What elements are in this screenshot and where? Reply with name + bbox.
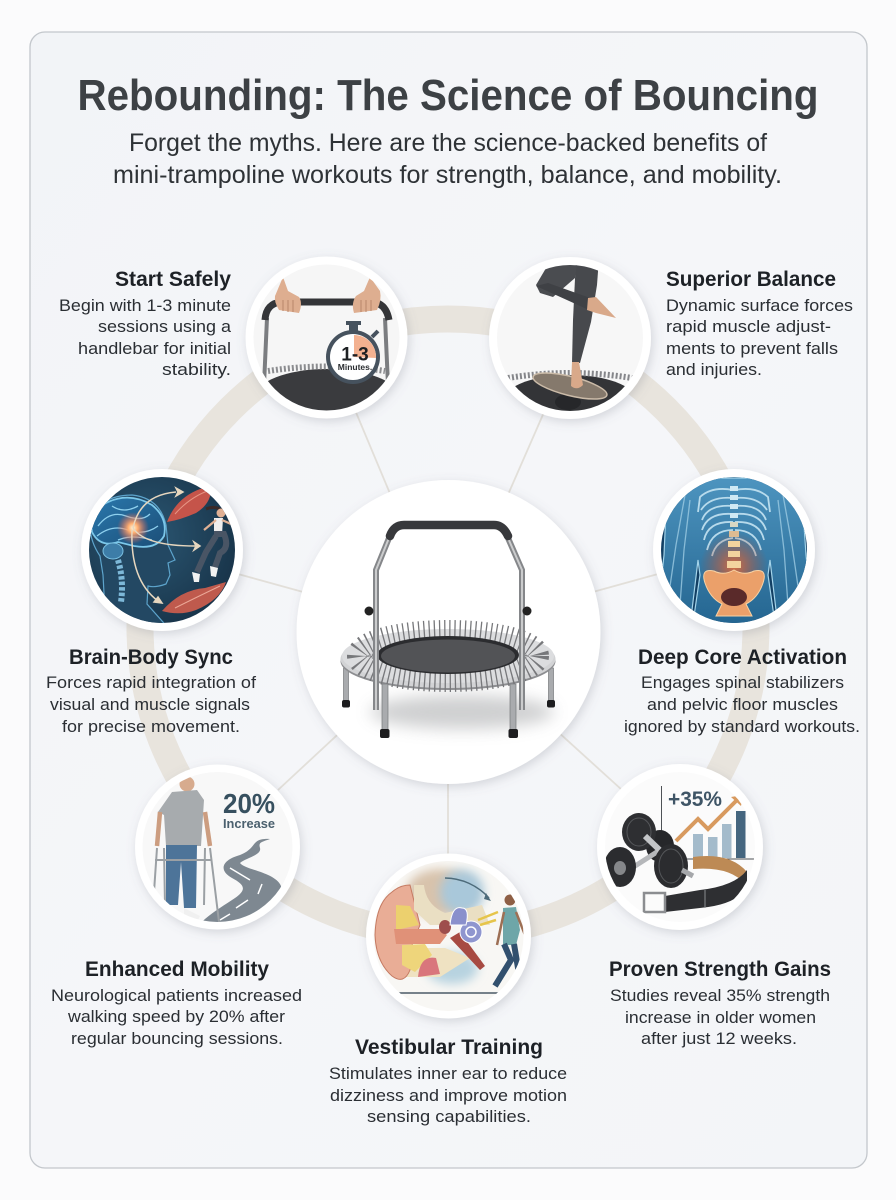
text block: brain-body sync: Forces rapid integration of [46, 673, 256, 692]
text block: superior balance: and injuries. [666, 360, 762, 379]
panel: brain-body sync icon [81, 469, 243, 631]
icon: stopwatch: 1-3 [341, 344, 369, 366]
text block: proven strength gains [609, 958, 831, 1048]
panel: proven strength gains icon [597, 764, 763, 930]
text block: start safely: stability. [162, 360, 231, 379]
icon: walking man [495, 894, 525, 986]
text block: vestibular training: dizziness and improve motion [330, 1086, 567, 1105]
icon: spine [727, 486, 741, 568]
text block: superior balance: rapid muscle adjust- [666, 317, 831, 336]
panel: superior balance icon [489, 257, 651, 425]
subtitle: mini-trampoline workouts for strength, balance, and mobility. [113, 161, 782, 189]
text block: start safely: Start Safely [115, 268, 231, 291]
text: +35%: +35% [668, 788, 722, 811]
icon: trampoline with handlebar [340, 525, 556, 738]
text block: enhanced mobility: walking speed by 20% after [67, 1007, 285, 1026]
icon: brain [91, 498, 165, 547]
text block: deep core activation: ignored by standard workouts. [624, 717, 860, 736]
text block: start safely [59, 268, 232, 379]
icon: pelvis [704, 570, 764, 616]
text block: start safely: sessions using a [98, 317, 232, 336]
panel: enhanced mobility icon [135, 764, 300, 930]
icon: translucent torso and arms [662, 477, 806, 623]
icon: balance board [532, 372, 608, 400]
text block: brain-body sync [46, 646, 256, 736]
text block: proven strength gains: Studies reveal 35% strength [610, 986, 830, 1005]
icon: weight belt [644, 856, 747, 912]
icon: upper muscle [167, 487, 211, 522]
text block: start safely: handlebar for initial [78, 339, 231, 358]
icon: ribcage [698, 489, 770, 556]
text block: superior balance [666, 268, 853, 379]
text block: proven strength gains: Proven Strength Gains [609, 958, 831, 981]
text block: enhanced mobility [51, 958, 302, 1048]
text block: brain-body sync: for precise movement. [62, 717, 240, 736]
panel: start safely icon [246, 256, 410, 425]
panel: vestibular training icon [366, 854, 531, 1018]
text block: enhanced mobility: Neurological patients increased [51, 986, 302, 1005]
text block: brain-body sync: Brain-Body Sync [69, 646, 233, 669]
text block: superior balance: ments to prevent falls [666, 339, 838, 358]
text block: proven strength gains: after just 12 weeks. [641, 1029, 797, 1048]
icon: runner [192, 507, 231, 582]
connector ring and spokes [140, 319, 756, 935]
text block: vestibular training: Vestibular Training [355, 1036, 543, 1059]
icon: dumbbells [604, 813, 693, 888]
text block: vestibular training: sensing capabilities. [367, 1107, 531, 1126]
center trampoline panel [296, 480, 600, 784]
text block: deep core activation: Engages spinal stabilizers [641, 673, 844, 692]
icon: growth bar chart [662, 786, 754, 859]
text block: vestibular training: Stimulates inner ear to reduce [329, 1064, 567, 1083]
text block: proven strength gains: increase in older women [625, 1008, 816, 1027]
text block: vestibular training [329, 1036, 567, 1126]
text block: deep core activation [624, 646, 860, 736]
icon: legs balancing [536, 258, 616, 388]
text block: start safely: Begin with 1-3 minute [59, 296, 231, 315]
icon: head silhouette [90, 495, 175, 630]
text block: deep core activation: Deep Core Activation [638, 646, 847, 669]
text block: superior balance: Superior Balance [666, 268, 836, 291]
icon: lower muscle [162, 582, 226, 613]
icon: hands on handlebar [275, 277, 381, 313]
subtitle [113, 129, 782, 189]
icon: stopwatch [326, 321, 380, 384]
title: Rebounding: The Science of Bouncing [78, 71, 818, 120]
text: 20% increase: 20% [223, 788, 275, 819]
text block: deep core activation: and pelvic floor muscles [647, 695, 838, 714]
text block: superior balance: Dynamic surface forces [666, 296, 853, 315]
icon: stopwatch: Minutes. [338, 362, 372, 372]
icon: older man with walker [154, 776, 219, 922]
icon: motion waves [406, 869, 491, 984]
text block: enhanced mobility: Enhanced Mobility [85, 958, 269, 981]
icon: arm bones [668, 495, 800, 605]
panel: enhanced mobility icon: Increase [223, 816, 275, 831]
icon: shadow under trampoline [370, 695, 554, 729]
panel: deep core activation icon [653, 469, 815, 631]
icon: ear cross-section [375, 885, 498, 979]
text block: enhanced mobility: regular bouncing sessions. [71, 1029, 283, 1048]
subtitle: Forget the myths. Here are the science-backed benefits of [129, 129, 767, 157]
text block: brain-body sync: visual and muscle signals [50, 695, 250, 714]
icon: winding road [200, 839, 281, 924]
icon: signal arrows [132, 488, 200, 603]
